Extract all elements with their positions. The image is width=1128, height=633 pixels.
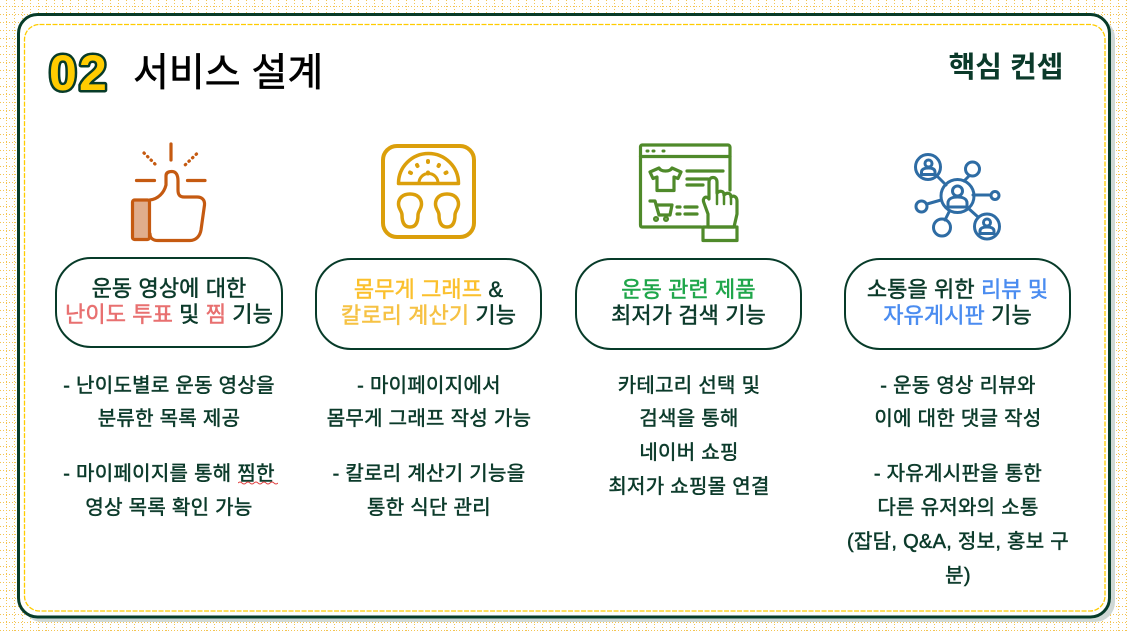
description text: 몸무게 그래프 작성 가능 <box>327 408 531 430</box>
description text: 이에 대한 댓글 작성 <box>874 408 1042 430</box>
description text: 네이버 쇼핑 <box>639 442 739 464</box>
spelling underline <box>238 482 278 484</box>
icon: people network <box>914 153 1001 240</box>
description text: - 칼로리 계산기 기능을 <box>333 463 525 485</box>
pill: feature title: 자유게시판 기능 <box>883 303 1032 328</box>
description text: - 마이페이지를 통해 찜한 <box>63 463 275 485</box>
description text: 통한 식단 관리 <box>367 497 491 519</box>
section number: 02 <box>49 45 107 100</box>
pill: feature title <box>575 258 802 350</box>
description text: 검색을 통해 <box>639 408 739 430</box>
description text: 최저가 쇼핑몰 연결 <box>608 476 770 498</box>
pill: feature title: 운동 영상에 대한 <box>92 276 246 301</box>
description text: (잡담, Q&A, 정보, 홍보 구 <box>847 531 1069 553</box>
pill: feature title: 칼로리 계산기 기능 <box>341 303 516 328</box>
panel: lowest price search <box>575 143 802 498</box>
description text: 분) <box>945 565 971 587</box>
icon: scale <box>381 144 476 239</box>
description text: 분류한 목록 제공 <box>98 408 240 430</box>
description text: 영상 목록 확인 가능 <box>85 497 253 519</box>
pill: feature title <box>315 258 542 350</box>
panel: difficulty vote and favorites <box>55 142 283 519</box>
description text: 다른 유저와의 소통 <box>877 497 1039 519</box>
icon: online shop <box>638 143 739 242</box>
pill: feature title: 운동 관련 제품 <box>621 277 756 302</box>
icon: thumbs up <box>130 142 207 242</box>
panel: reviews and free board <box>844 153 1071 587</box>
description text: - 난이도별로 운동 영상을 <box>63 375 275 397</box>
pill: feature title <box>55 257 283 348</box>
pill: feature title: 몸무게 그래프 & <box>354 277 503 302</box>
pill: feature title: 소통을 위한 리뷰 및 <box>867 277 1048 302</box>
pill: feature title: 난이도 투표 및 찜 기능 <box>65 302 273 327</box>
description text: - 운동 영상 리뷰와 <box>880 375 1036 397</box>
panel: weight graph and calorie calculator <box>315 144 542 519</box>
title: 서비스 설계 <box>133 52 323 95</box>
description text: - 자유게시판을 통한 <box>874 463 1042 485</box>
description text: 카테고리 선택 및 <box>618 375 760 397</box>
pill: feature title: 최저가 검색 기능 <box>611 303 766 328</box>
description text: - 마이페이지에서 <box>357 375 501 397</box>
subtitle: core concept: 핵심 컨셉 <box>949 52 1063 84</box>
pill: feature title <box>844 258 1071 350</box>
